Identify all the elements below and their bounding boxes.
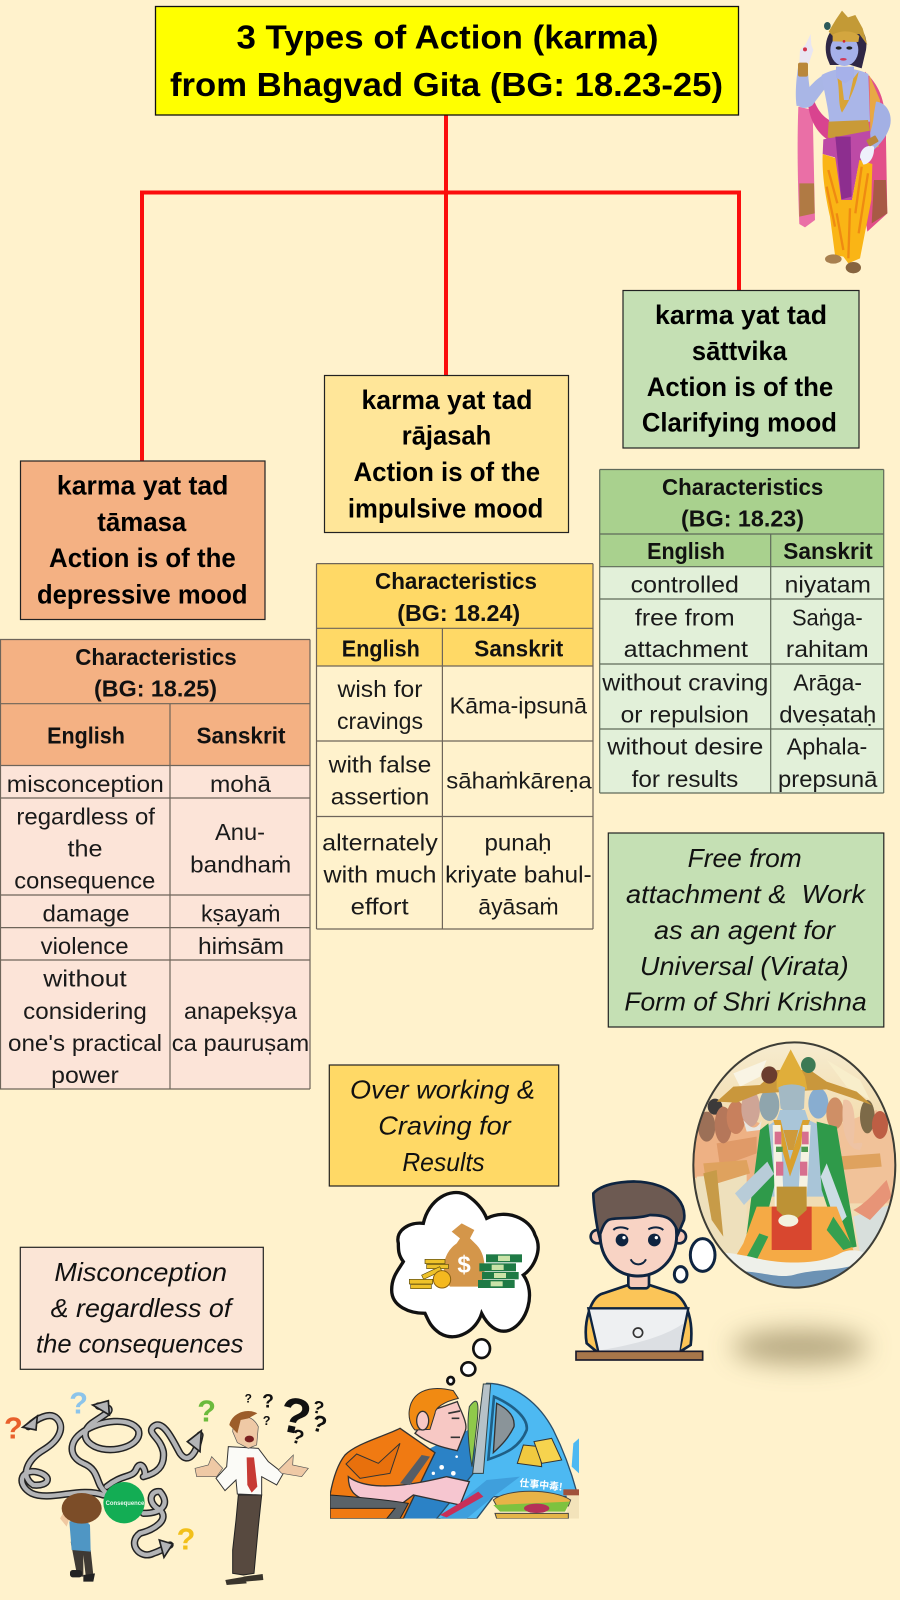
table: tamasa characteristics: mohā [210, 771, 272, 797]
table: sattvika characteristics [600, 470, 884, 793]
table: rajasah characteristics: sāhaṁkāreṇa [446, 767, 593, 793]
panel: tamasa heading box: tāmasa [97, 507, 187, 537]
illustration: confused boy and tangled consequence arrows: ? [245, 1391, 252, 1405]
panel: rajasah heading box: rājasah [402, 420, 491, 450]
table: tamasa characteristics: violence [41, 933, 129, 959]
title: from Bhagvad Gita (BG: 18.23-25) [170, 66, 723, 103]
table: sattvika characteristics: without desire [606, 734, 763, 760]
callout: over working [329, 1065, 559, 1186]
illustration: floor shadow [732, 1330, 868, 1364]
table: tamasa characteristics: (BG: 18.25) [94, 676, 217, 702]
panel: rajasah heading box: karma yat tad [362, 385, 532, 415]
table: rajasah characteristics: kriyate bahul- [445, 861, 592, 887]
table: tamasa characteristics: Sanskrit [196, 722, 286, 748]
panel: tamasa heading box: karma yat tad [57, 470, 228, 500]
callout: free from attachment: attachment & Work [626, 879, 867, 909]
table: tamasa characteristics: power [51, 1062, 119, 1088]
table: rajasah characteristics [316, 564, 593, 929]
thought cloud with money: $ [457, 1252, 471, 1279]
table: sattvika characteristics: (BG: 18.23) [681, 506, 804, 532]
panel: sattvika heading box: Clarifying mood [642, 408, 837, 438]
callout: free from attachment: Form of Shri Krishna [624, 987, 867, 1017]
table: tamasa characteristics: Anu- [215, 819, 265, 845]
table: sattvika characteristics: niyatam [785, 572, 871, 598]
callout: misconception: & regardless of [51, 1293, 234, 1323]
table: tamasa characteristics: hiṁsām [198, 933, 284, 959]
callout: misconception: the consequences [36, 1329, 243, 1359]
table: rajasah characteristics: Characteristics [375, 568, 537, 594]
table: sattvika characteristics: rahitam [786, 636, 869, 662]
table: rajasah characteristics: effort [351, 893, 409, 919]
table: sattvika characteristics: Sanskrit [783, 538, 873, 564]
callout: misconception: Misconception [54, 1257, 227, 1287]
red connector lines [142, 115, 739, 461]
table: sattvika characteristics: English [647, 538, 725, 564]
callout: over working: Over working & [350, 1074, 535, 1104]
table: tamasa characteristics: bandhaṁ [190, 852, 291, 878]
table: sattvika characteristics: dveṣataḥ [779, 702, 876, 728]
table: rajasah characteristics: with false [328, 752, 431, 778]
table: sattvika characteristics: without craving [601, 669, 768, 695]
callout: free from attachment: Universal (Virata) [640, 951, 849, 981]
illustration: confused boy and tangled consequence arrows: ? [197, 1395, 216, 1429]
panel: sattvika heading box: karma yat tad [655, 300, 827, 330]
table: tamasa characteristics: regardless of [16, 803, 155, 829]
table: sattvika characteristics: Saṅga- [792, 604, 863, 630]
table: sattvika characteristics: prepsunā [778, 766, 878, 792]
man at computer: 仕事中毒! [519, 1474, 563, 1494]
table: sattvika characteristics: or repulsion [621, 702, 749, 728]
table: tamasa characteristics: misconception [7, 771, 164, 797]
table: rajasah characteristics: alternately [322, 830, 438, 856]
illustration: confused boy and tangled consequence arrows: ? [309, 1410, 330, 1438]
table: rajasah characteristics: English [342, 636, 420, 662]
table: tamasa characteristics: the [68, 835, 102, 861]
table: rajasah characteristics: punaḥ [484, 830, 552, 856]
table: sattvika characteristics: Arāga- [793, 669, 862, 695]
panel: sattvika heading box [623, 290, 859, 448]
table: sattvika characteristics: free from [635, 604, 735, 630]
panel: rajasah heading box: impulsive mood [348, 494, 543, 524]
table: rajasah characteristics: with much [322, 861, 436, 887]
illustration: boy at laptop thinking [576, 1182, 715, 1360]
panel: sattvika heading box: sāttvika [692, 336, 787, 366]
table: rajasah characteristics: cravings [337, 708, 423, 734]
illustration: confused boy and tangled consequence arrows: ? [262, 1391, 274, 1412]
table: tamasa characteristics: ca pauruṣam [172, 1030, 309, 1056]
table: sattvika characteristics: for results [632, 766, 738, 792]
table: tamasa characteristics: damage [42, 900, 130, 926]
table: sattvika characteristics: controlled [631, 572, 739, 598]
illustration: over-working man craving money [330, 1193, 579, 1519]
illustration: confused boy and tangled consequence arrows: Consequence [106, 1500, 145, 1507]
table: tamasa characteristics: English [47, 722, 125, 748]
panel: rajasah heading box: Action is of the [354, 457, 540, 487]
table: rajasah characteristics: (BG: 18.24) [397, 600, 520, 626]
table: tamasa characteristics: without [42, 966, 127, 992]
table: sattvika characteristics: attachment [624, 636, 748, 662]
icon: Krishna figure [796, 11, 891, 273]
illustration: confused boy and tangled consequence arrows [4, 1385, 330, 1585]
title [156, 6, 738, 115]
panel: tamasa heading box: Action is of the [49, 543, 236, 573]
callout: misconception [20, 1247, 263, 1369]
table: tamasa characteristics [0, 640, 310, 1089]
title: 3 Types of Action (karma) [236, 18, 658, 56]
table: tamasa characteristics: Characteristics [75, 644, 237, 670]
illustration: Universal Virata form of Krishna [690, 1040, 900, 1293]
callout: free from attachment: as an agent for [654, 915, 836, 945]
illustration: confused boy and tangled consequence arrows: ? [4, 1411, 23, 1445]
panel: rajasah heading box [324, 376, 568, 532]
table: rajasah characteristics: āyāsaṁ [478, 893, 559, 919]
man at computer [330, 1383, 579, 1519]
illustration: confused boy and tangled consequence arrows: ? [69, 1386, 88, 1420]
illustration: confused boy and tangled consequence arrows: ? [274, 1385, 316, 1447]
thought cloud with money [392, 1193, 538, 1337]
illustration: confused boy and tangled consequence arrows: ? [263, 1414, 271, 1428]
panel: sattvika heading box: Action is of the [647, 372, 833, 402]
table: tamasa characteristics: kṣayaṁ [201, 900, 280, 926]
table: tamasa characteristics: anapekṣya [184, 998, 298, 1024]
thought bubbles [447, 1339, 490, 1384]
table: rajasah characteristics: Sanskrit [474, 636, 563, 662]
callout: free from attachment: Free from [688, 843, 802, 873]
man with raised hands [195, 1411, 308, 1585]
table: rajasah characteristics: Kāma-ipsunā [450, 692, 588, 718]
table: tamasa characteristics: one's practical [8, 1030, 162, 1056]
panel: tamasa heading box: depressive mood [37, 580, 248, 610]
table: sattvika characteristics: Characteristics [662, 474, 823, 500]
callout: over working: Results [402, 1147, 485, 1177]
illustration: confused boy and tangled consequence arrows: ? [289, 1425, 306, 1450]
illustration: confused boy and tangled consequence arrows: ? [310, 1396, 326, 1419]
panel: tamasa heading box [20, 461, 265, 620]
table: rajasah characteristics: wish for [336, 676, 423, 702]
table: tamasa characteristics: consequence [14, 868, 155, 894]
callout: over working: Craving for [378, 1111, 512, 1141]
table: rajasah characteristics: assertion [331, 784, 429, 810]
table: sattvika characteristics: Aphala- [787, 734, 867, 760]
table: tamasa characteristics: considering [23, 998, 147, 1024]
illustration: confused boy and tangled consequence arrows: ? [177, 1522, 195, 1556]
callout: free from attachment [608, 833, 884, 1027]
